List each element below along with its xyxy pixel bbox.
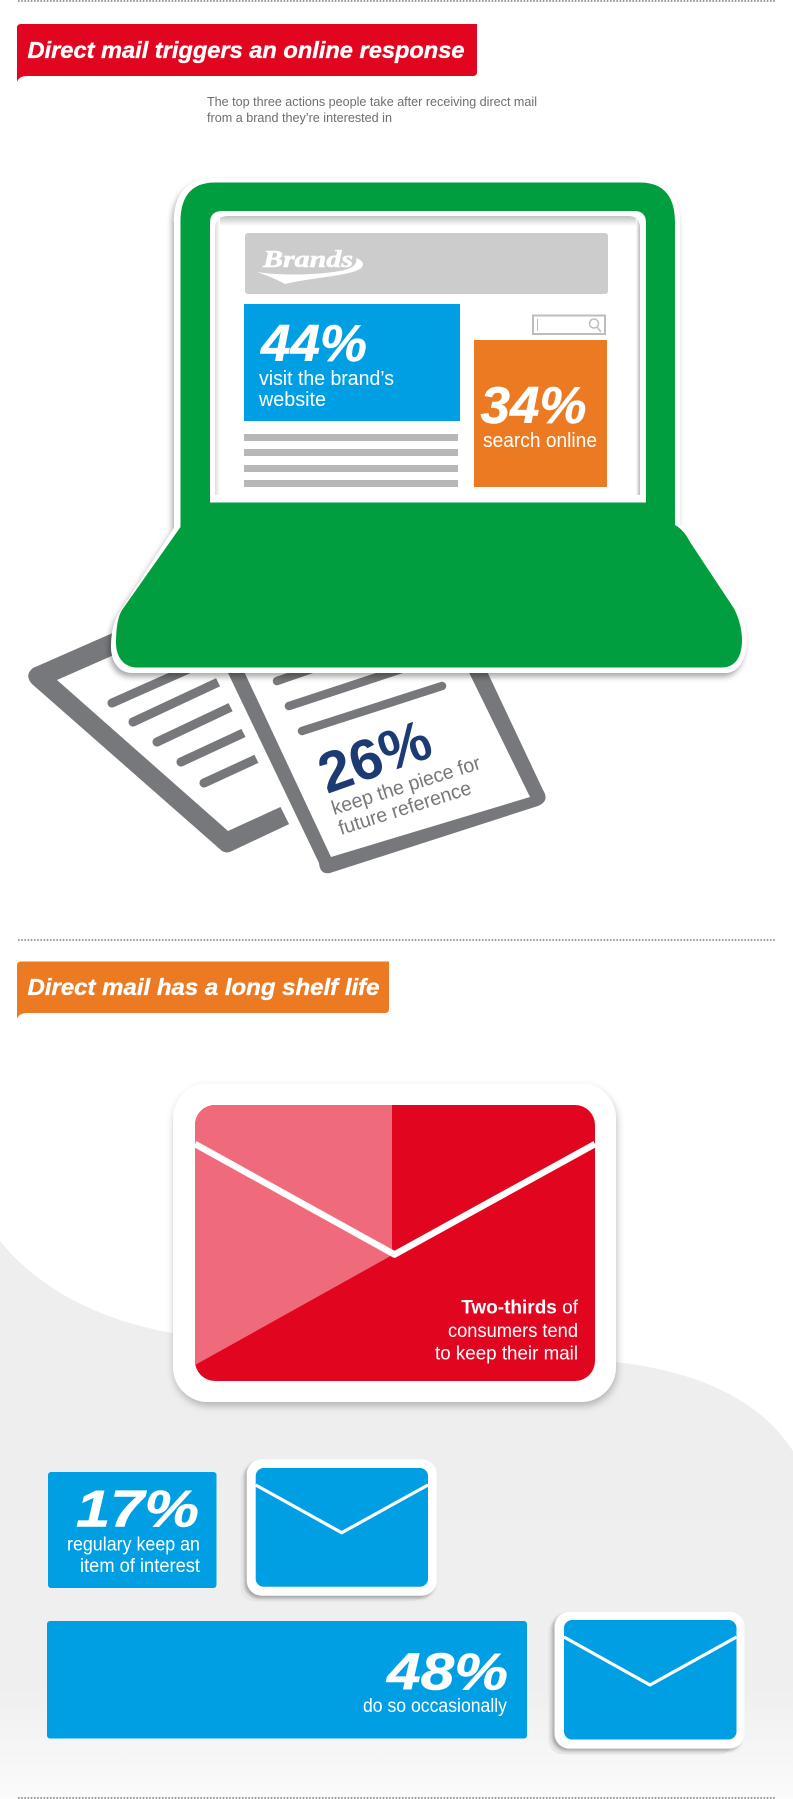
caption 26%: keep the piece for — [329, 752, 484, 820]
envelope caption: consumers tend — [448, 1321, 578, 1342]
envelope caption — [435, 1298, 579, 1364]
search box — [533, 316, 605, 334]
envelope caption: Two-thirds of — [461, 1298, 579, 1318]
subtitle text — [207, 94, 537, 125]
subtitle text: The top three actions people take after receiving direct mail — [207, 94, 537, 109]
left document — [28, 599, 330, 852]
stat panel 17%: 17% — [76, 1480, 199, 1538]
blue stat panel 44%: 44% — [260, 315, 367, 373]
envelope fold — [195, 1144, 595, 1254]
brands logo — [257, 247, 363, 284]
caption 44%: website — [258, 389, 326, 411]
heading 1: Direct mail triggers an online response — [28, 37, 465, 63]
divider middle — [18, 939, 776, 941]
laptop screen — [210, 211, 646, 502]
orange stat panel 34% — [474, 340, 607, 487]
caption 26%: future reference — [336, 777, 474, 840]
stat panel 17% — [48, 1472, 216, 1588]
illustration: laptop — [111, 178, 747, 673]
stat panel 48% — [47, 1621, 527, 1738]
stat 26%: 26% — [310, 708, 440, 806]
caption 44% — [258, 368, 394, 411]
heading 2: Direct mail has a long shelf life — [28, 974, 380, 1000]
orange stat panel 34%: 34% — [480, 377, 586, 435]
small blue envelope 1 — [241, 1459, 437, 1601]
divider bottom — [18, 1797, 776, 1799]
caption 17%: regulary keep an — [67, 1534, 200, 1556]
caption 17% — [67, 1534, 201, 1577]
banner: direct mail has a long shelf life — [17, 962, 389, 1019]
large red envelope — [173, 1084, 616, 1402]
blue stat panel 44% — [244, 304, 460, 421]
divider top — [18, 0, 776, 2]
article text lines — [244, 434, 458, 487]
background wave — [0, 1241, 793, 1799]
caption 44%: visit the brand’s — [259, 368, 394, 390]
left document text lines — [112, 664, 280, 783]
caption 17%: item of interest — [80, 1556, 201, 1577]
brands logo: Brands — [262, 247, 353, 273]
caption 34%: search online — [483, 430, 597, 452]
right document text lines — [277, 661, 442, 731]
laptop body — [111, 178, 747, 673]
subtitle text: from a brand they’re interested in — [207, 110, 392, 125]
envelope caption: to keep their mail — [435, 1344, 578, 1364]
banner: direct mail triggers an online response — [17, 24, 477, 82]
envelope pink shade — [195, 1105, 392, 1365]
caption 48%: do so occasionally — [363, 1696, 507, 1717]
stat panel 48%: 48% — [386, 1644, 508, 1702]
small blue envelope 2 — [549, 1612, 744, 1754]
right document — [202, 650, 560, 890]
illustration: documents — [28, 599, 560, 890]
website header bar — [245, 233, 608, 294]
